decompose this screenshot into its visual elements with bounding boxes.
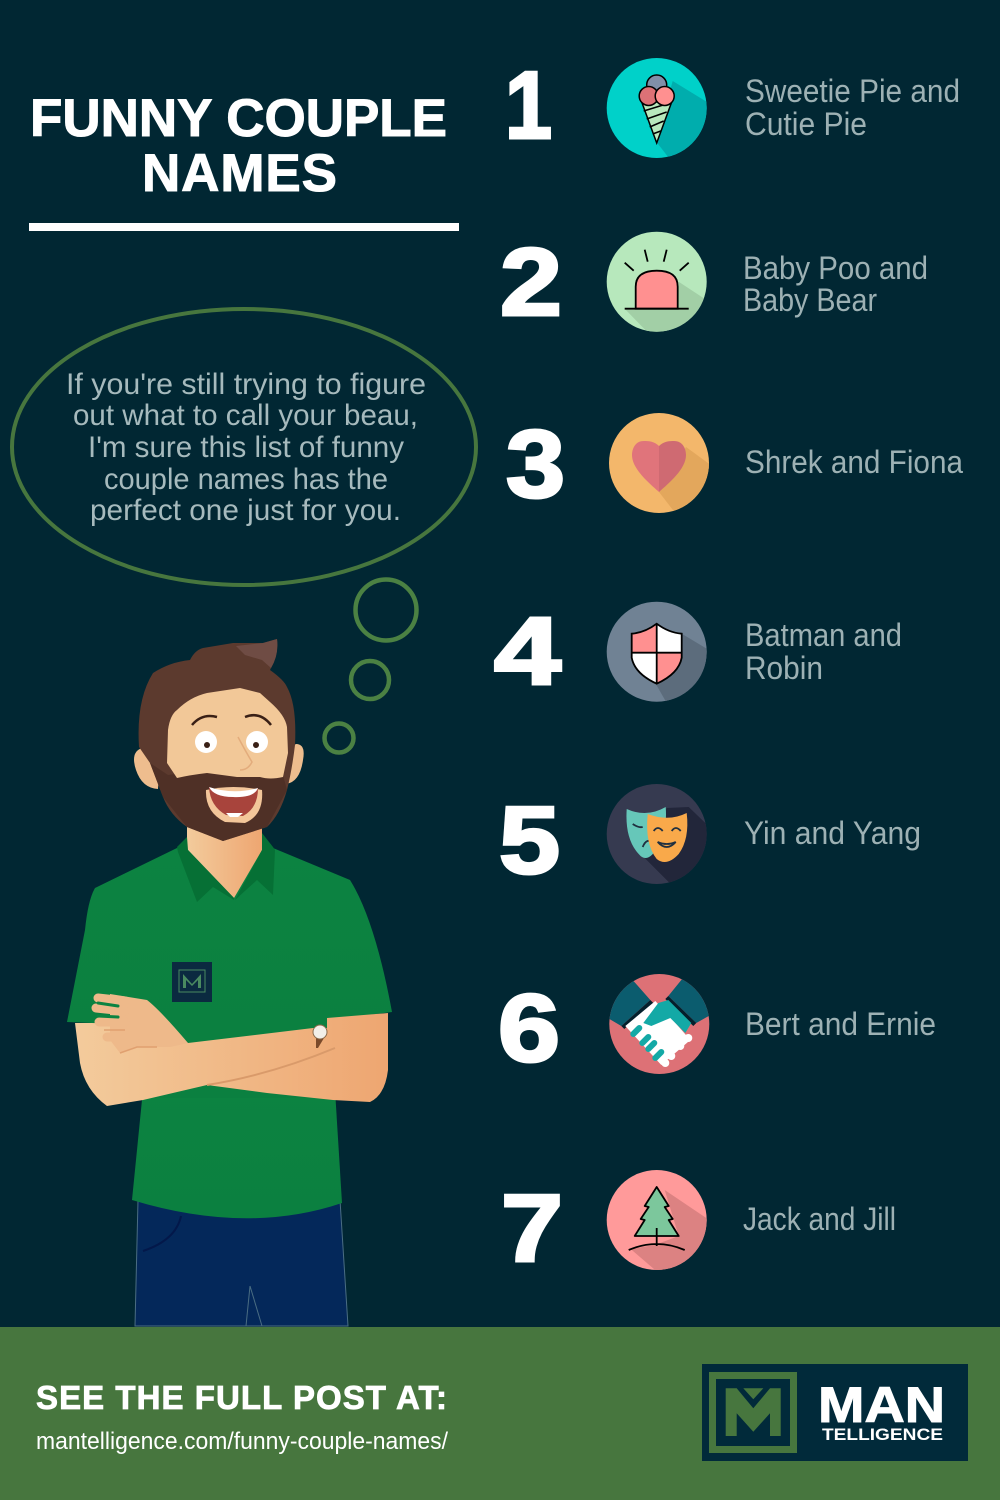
bubble text <box>66 368 426 527</box>
footer band <box>0 1327 1000 1500</box>
chest badge <box>172 962 212 1002</box>
name 2 <box>743 250 928 318</box>
name 2: Baby Poo and <box>743 250 928 286</box>
icon: theatre masks <box>606 784 707 884</box>
pants <box>135 1200 348 1326</box>
icon: siren <box>606 232 707 332</box>
name 4: Batman and <box>745 617 902 653</box>
watch <box>313 1025 327 1048</box>
eyes and brows <box>192 715 271 770</box>
number 6: 6 <box>498 975 560 1082</box>
forearm shadow <box>207 1048 335 1085</box>
icon: ice cream <box>606 58 707 158</box>
number 1: 1 <box>505 52 552 159</box>
bubble text: perfect one just for you. <box>90 494 401 527</box>
number 5: 5 <box>499 787 560 894</box>
number 2: 2 <box>500 229 562 336</box>
bubble text: I'm sure this list of funny <box>88 431 404 464</box>
name 5: Yin and Yang <box>744 815 921 851</box>
bubble text: If you're still trying to figure <box>66 368 426 401</box>
name 4: Robin <box>745 650 823 686</box>
logo: MAN <box>818 1377 945 1433</box>
title <box>30 89 447 203</box>
collar <box>177 833 275 902</box>
title: NAMES <box>142 144 337 203</box>
hand <box>96 994 188 1053</box>
icon: shield <box>606 602 707 702</box>
neck <box>187 822 262 900</box>
thought bubble <box>12 309 476 585</box>
number 3: 3 <box>506 411 565 518</box>
name 4 <box>745 617 902 686</box>
number 7: 7 <box>501 1175 563 1282</box>
face <box>167 688 288 778</box>
mouth <box>206 787 262 823</box>
hair and beard <box>139 639 295 841</box>
logo <box>702 1364 968 1461</box>
number 4: 4 <box>494 598 561 705</box>
ears <box>134 744 304 789</box>
name 6: Bert and Ernie <box>745 1006 936 1042</box>
shirt <box>67 833 392 1218</box>
name 3: Shrek and Fiona <box>745 444 963 480</box>
icon: handshake <box>609 974 710 1074</box>
name 2: Baby Bear <box>743 282 877 318</box>
bubble text: couple names has the <box>104 463 388 496</box>
name 1: Sweetie Pie and <box>745 73 960 109</box>
footer url: mantelligence.com/funny-couple-names/ <box>36 1428 448 1455</box>
arms <box>75 1013 388 1106</box>
character: man with crossed arms <box>67 639 392 1326</box>
bubble text: out what to call your beau, <box>73 399 418 432</box>
footer heading: SEE THE FULL POST AT: <box>36 1379 447 1416</box>
name 7: Jack and Jill <box>743 1201 896 1237</box>
title: FUNNY COUPLE <box>30 89 447 148</box>
icon: pine tree <box>606 1170 707 1270</box>
name 1 <box>745 73 960 142</box>
icon: heart <box>609 413 709 513</box>
title underline <box>29 223 459 231</box>
name 1: Cutie Pie <box>745 106 867 142</box>
thought circles <box>324 580 416 752</box>
logo: TELLIGENCE <box>822 1425 943 1444</box>
